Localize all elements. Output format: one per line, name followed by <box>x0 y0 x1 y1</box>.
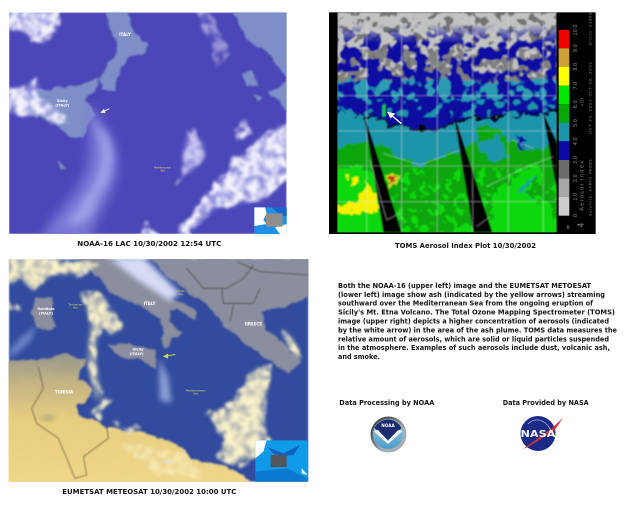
labels: map place names: GREECE <box>245 322 262 327</box>
labels: sea names: Tyrrhenian <box>68 303 83 307</box>
arrow: white aerosol arrow <box>388 113 401 124</box>
heading: Data Provided by NASA: Data Provided by NASA <box>503 399 589 407</box>
icon: NASA logo: NASA <box>520 429 556 440</box>
icon: NASA logo <box>520 416 563 451</box>
legend: vertical labels: Orbits: 23802 <box>589 13 593 45</box>
text block: description: by the white arrow) in the area of the ash plume. TOMS data measures the <box>338 326 617 334</box>
arrow: yellow ash arrow <box>101 109 109 113</box>
labels: sea names: Sea <box>73 306 78 310</box>
chart: grid <box>337 12 557 232</box>
text block: description: in the atmosphere. Examples of such aerosols include dust, volcanic ash, <box>338 344 610 352</box>
chart: aerosol index map <box>330 12 563 240</box>
legend: scale values <box>573 24 579 217</box>
text block: description: and smoke. <box>338 353 380 361</box>
map: clouds <box>7 257 303 478</box>
text block: description: Sicily's Mt. Etna Volcano. The Total Ozone Mapping Spectrometer (TOMS) <box>338 309 615 317</box>
legend: scale values: 4.0 <box>573 137 579 145</box>
label: Sicily: Sicily <box>57 99 68 103</box>
text block: description: southward over the Mediterranean Sea from the ongoing eruption of <box>338 300 594 308</box>
label: Mediterranean Sea: Sea <box>160 169 165 172</box>
text block: description: image (upper right) depicts a higher concentration of aerosols (indicated <box>338 318 609 326</box>
labels: sea names: Sea <box>178 292 184 296</box>
caption: TOMS: TOMS Aerosol Index Plot 10/30/2002 <box>395 242 536 250</box>
caption: NOAA-16: NOAA-16 LAC 10/30/2002 12:54 UTC <box>77 240 221 248</box>
legend: scale values: 7.0 <box>573 82 579 90</box>
label: Mediterranean Sea <box>154 166 172 172</box>
labels: sea names: Sea <box>193 392 199 396</box>
labels: map place names <box>37 301 262 465</box>
legend: vertical labels: 4 <box>577 223 586 228</box>
map: ash plume <box>40 103 117 240</box>
text block: description: Both the NOAA-16 (upper left) image and the EUMETSAT METOESAT <box>338 282 591 290</box>
legend: colour scale <box>559 30 569 216</box>
legend: scale values: 3.0 <box>573 156 579 164</box>
heading: Data Processing by NOAA: Data Processing by NOAA <box>339 399 435 407</box>
legend: vertical labels <box>565 13 593 230</box>
map: ash plume <box>159 358 172 403</box>
labels: map place names: LIBYA <box>161 460 175 465</box>
legend: scale values: 6.0 <box>573 100 579 108</box>
legend: vertical labels: = <box>565 224 573 230</box>
legend: vertical labels: Satellite: EARTH PROBE <box>589 159 593 216</box>
labels: sea names: Adriatic <box>176 289 186 293</box>
text block: description: relative amount of aerosols, which are solid or liquid particles suspended <box>338 335 609 343</box>
labels: map place names: (ITALY) <box>39 312 53 316</box>
legend: scale values: 9.0 <box>573 44 579 52</box>
chart: orbit gaps <box>363 112 557 232</box>
legend: scale values: 8.0 <box>573 63 579 71</box>
panel: EUMETSAT Meteosat image <box>3 257 313 488</box>
legend: scale values: 5.0 <box>573 119 579 127</box>
inset locator map <box>254 207 287 234</box>
labels: map place names: (ITALY) <box>130 352 144 356</box>
legend: scale values: 2.0 <box>573 174 579 182</box>
labels: sea names: Mediterranean <box>186 388 206 392</box>
panel: TOMS aerosol index plot <box>329 12 596 240</box>
map: land masses <box>13 8 293 171</box>
labels: map place names: Sardinia <box>37 307 55 311</box>
legend: scale values: 10.0 <box>573 24 579 36</box>
labels: map place names: ITALY <box>144 301 156 306</box>
map: borders <box>32 262 308 478</box>
chart: green ash streak <box>382 104 385 117</box>
label: Mediterranean Sea: Mediterranean <box>154 166 172 169</box>
icon: NOAA logo: NOAA <box>381 423 395 428</box>
arrow: yellow ash arrow <box>164 354 175 358</box>
legend: vertical labels: Aerosol Index <box>579 161 585 211</box>
map: clouds underlay <box>10 259 300 462</box>
icon: NOAA logo <box>370 416 406 452</box>
legend: scale values: 1.0 <box>573 193 579 201</box>
text block: description <box>338 282 617 361</box>
label: Sicily <box>55 99 70 108</box>
legend: vertical labels: OCT 30, 2002 OCT 30, 2002 <box>589 62 593 134</box>
map: Africa <box>3 355 260 488</box>
inset locator map <box>255 440 308 482</box>
caption: EUMETSAT: EUMETSAT METEOSAT 10/30/2002 10:00 UTC <box>62 488 236 496</box>
map: Italy and Balkans <box>27 257 313 372</box>
map: clouds <box>5 8 293 237</box>
labels: map place names: TUNISIA <box>55 389 74 394</box>
label: ITALY: ITALY <box>119 32 131 37</box>
legend: vertical labels: +10 <box>579 98 584 107</box>
text block: description: (lower left) image show ash (indicated by the yellow arrows) streaming <box>338 291 605 299</box>
legend: scale values: 0 <box>573 214 579 217</box>
labels: map place names: Sicily <box>133 347 144 351</box>
labels: sea names <box>68 289 206 396</box>
label: Sicily: (ITALY) <box>55 104 70 108</box>
panel: NOAA-16 satellite image <box>5 8 293 240</box>
map: clouds underlay <box>9 12 287 232</box>
